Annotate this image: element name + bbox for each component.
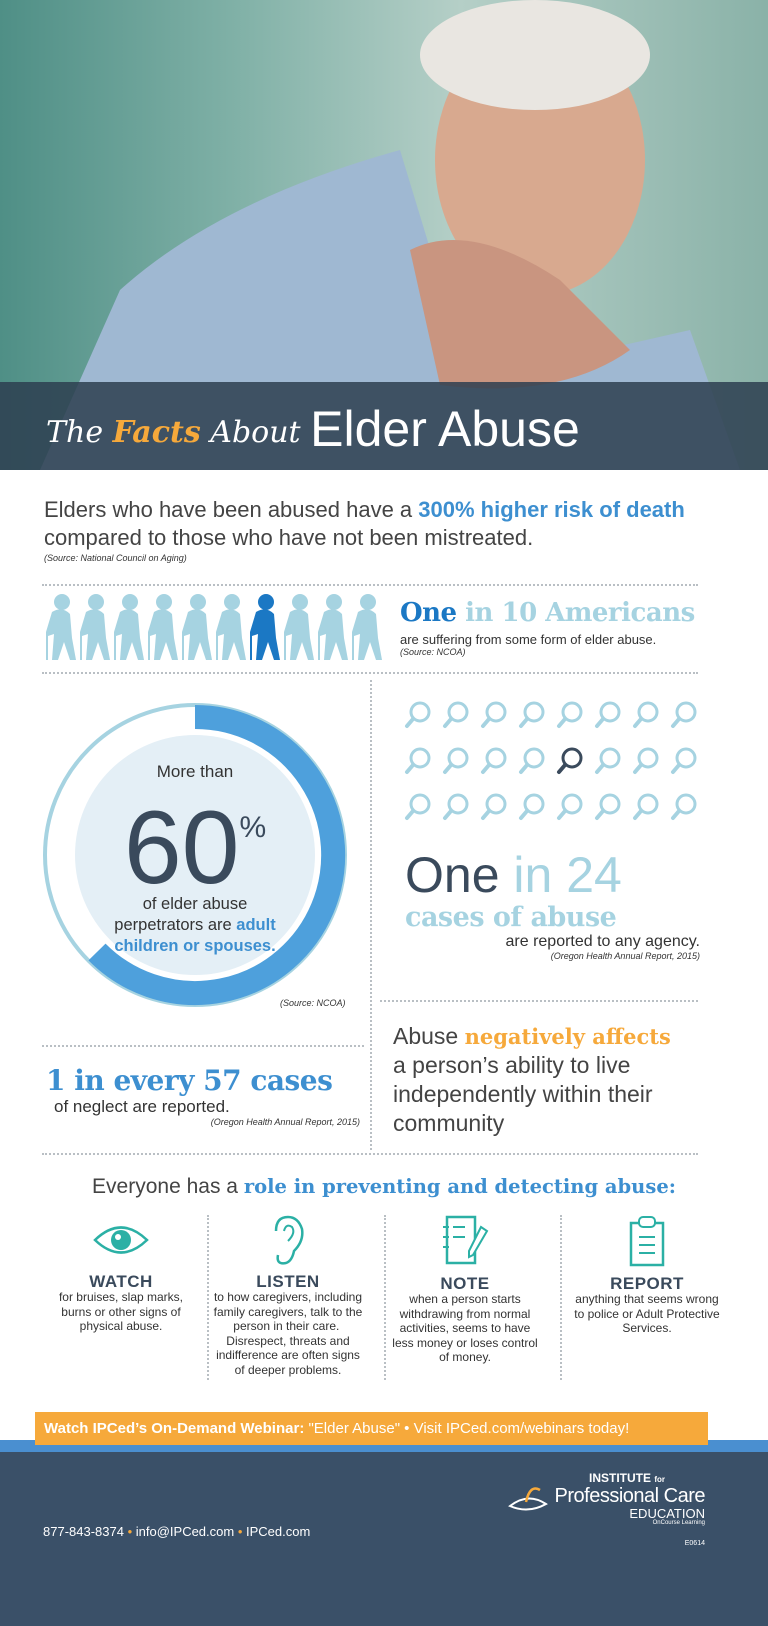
stat: one in 24: One in 24 (405, 847, 622, 903)
column: report: anything that seems wrong to police or Adult Protective Services. (574, 1292, 720, 1335)
people icons (46, 594, 382, 660)
column: note: when a person starts withdrawing from normal activities, seems to have less money or loses control of money. (392, 1292, 538, 1364)
logo (508, 1471, 705, 1547)
abuse statement: Abuse negatively affects a person’s ability to live independently within their community (393, 1023, 671, 1136)
icon: clipboard (630, 1216, 664, 1266)
logo: INSTITUTE for (589, 1471, 665, 1485)
donut text (114, 762, 276, 955)
icon: eye (93, 1226, 149, 1254)
title: The Facts About Elder Abuse (46, 401, 580, 457)
hero photo (0, 0, 768, 470)
stat: one in 10: One in 10 Americans (400, 598, 695, 628)
column: note (392, 1216, 538, 1364)
stat: one in 10: (Source: NCOA) (400, 647, 466, 657)
stat: one in 10 (400, 598, 695, 657)
stat: one in 24 (405, 847, 700, 961)
stat: 1 in 57: of neglect are reported. (54, 1097, 230, 1116)
contact info: 877-843-8374 • info@IPCed.com • IPCed.com (43, 1524, 310, 1539)
logo: OnCourse Learning (653, 1520, 705, 1526)
stat: one in 24: (Oregon Health Annual Report, 2015) (551, 951, 700, 961)
icon: notepad (443, 1216, 488, 1264)
intro statement: Elders who have been abused have a 300% higher risk of death compared to those who have not been mistreated. (44, 497, 685, 550)
donut chart (43, 703, 347, 1007)
column: listen: LISTEN (256, 1272, 320, 1290)
logo: Professional Care (555, 1485, 705, 1507)
magnifier grid (404, 702, 696, 820)
title band (0, 382, 768, 470)
stat: one in 24: cases of abuse (405, 902, 616, 933)
column: report: REPORT (610, 1274, 684, 1292)
footer (0, 1440, 768, 1626)
intro statement: (Source: National Council on Aging) (44, 553, 187, 563)
donut text: of elder abuse perpetrators are adult children or spouses. (114, 895, 276, 955)
column: listen (214, 1216, 362, 1376)
stat: one in 10: are suffering from some form of elder abuse. (400, 632, 656, 647)
stat: 1 in 57 (46, 1064, 360, 1127)
column: watch: WATCH (89, 1272, 153, 1290)
webinar banner (35, 1412, 708, 1445)
icon: ear (274, 1216, 304, 1265)
column: report (574, 1216, 720, 1335)
text: (Source: NCOA) (280, 998, 346, 1008)
webinar banner: Watch IPCed’s On-Demand Webinar: "Elder Abuse" • Visit IPCed.com/webinars today! (44, 1420, 629, 1437)
column: note: NOTE (440, 1274, 490, 1292)
stat: 1 in 57: (Oregon Health Annual Report, 2015) (211, 1117, 360, 1127)
logo: EDUCATION (629, 1506, 705, 1521)
donut text: 60% (124, 790, 266, 906)
donut text: More than (157, 762, 233, 781)
roles heading: Everyone has a role in preventing and detecting abuse: (92, 1175, 676, 1198)
logo: E0614 (685, 1540, 705, 1547)
stat: 1 in 57: 1 in every 57 cases (46, 1064, 332, 1097)
column: listen: to how caregivers, including family caregivers, talk to the person in their care. Disrespect, threats and indifference are often signs of deeper problems. (214, 1290, 362, 1376)
column: watch (59, 1226, 183, 1333)
stat: one in 24: are reported to any agency. (506, 933, 700, 950)
column: watch: for bruises, slap marks, burns or other signs of physical abuse. (59, 1290, 183, 1333)
